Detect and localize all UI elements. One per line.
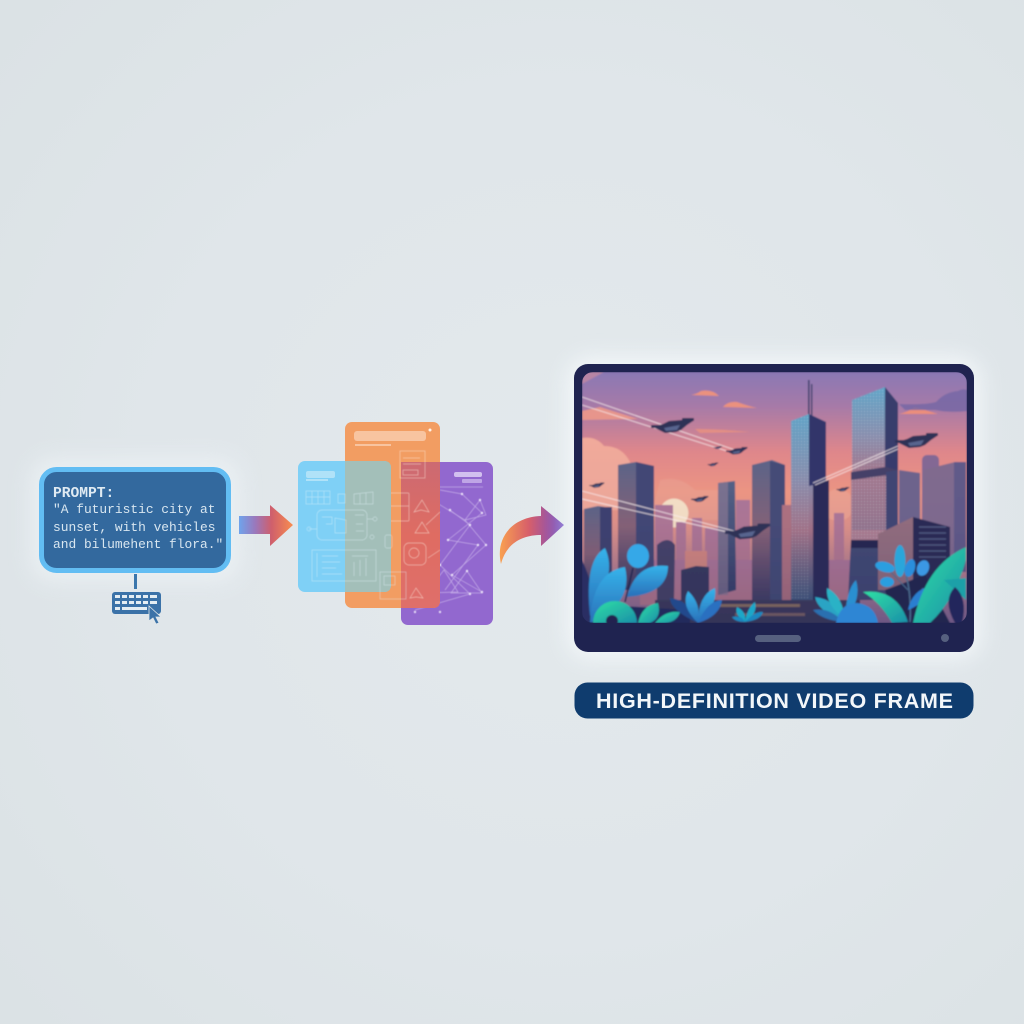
layer: orange [345, 422, 440, 608]
monitor home bar [755, 635, 801, 642]
prompt text [53, 502, 223, 552]
panel: layered model stack [298, 422, 493, 625]
far clouds [582, 372, 967, 520]
mid buildings [584, 455, 966, 610]
arrow: prompt to layers [239, 505, 293, 546]
panel: prompt input [30, 458, 240, 582]
prompt heading: PROMPT: [53, 486, 114, 502]
arrow: layers to video frame [500, 506, 564, 564]
icon: keyboard and cursor [112, 574, 161, 624]
layer: purple [401, 462, 493, 625]
sun [660, 498, 688, 528]
main towers [791, 380, 898, 602]
prompt text: and bilumehent flora." [53, 537, 223, 552]
prompt text: sunset, with vehicles [53, 520, 215, 535]
caption: high-definition video frame [574, 682, 974, 718]
prompt text: "A futuristic city at [53, 502, 215, 517]
panel: video frame monitor [566, 356, 982, 660]
ground band [655, 600, 860, 623]
contrails [582, 397, 898, 533]
illustration: futuristic city at sunset [582, 372, 967, 627]
layer: blue [298, 461, 406, 599]
flying vehicles [589, 418, 938, 539]
low block [878, 517, 950, 590]
caption: high-definition video frame: HIGH-DEFINITION VIDEO FRAME [596, 689, 953, 713]
screen shading [582, 474, 967, 623]
monitor camera dot [941, 634, 949, 642]
flora [582, 544, 966, 627]
distant haze buildings [640, 500, 860, 605]
